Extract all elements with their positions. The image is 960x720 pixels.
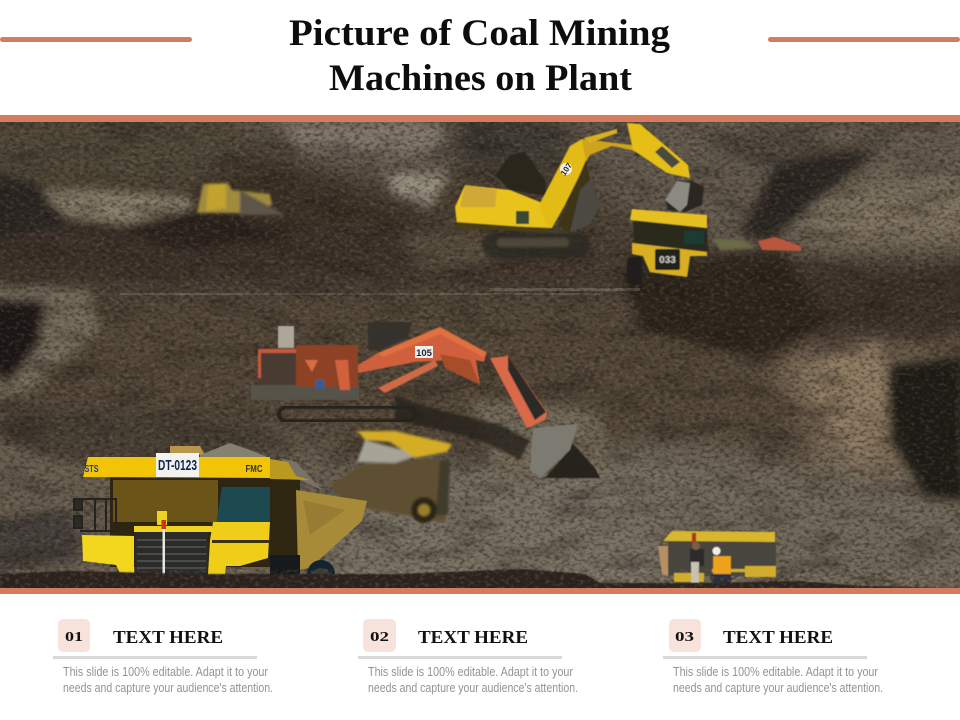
body text 03: needs and capture your audience's attention. xyxy=(673,681,883,695)
photo bottom border band xyxy=(0,588,960,594)
excavator tracks xyxy=(279,407,415,421)
worker with helmet xyxy=(711,547,731,583)
divider 03 xyxy=(663,656,867,659)
small orange machine far right xyxy=(758,237,802,251)
boom and arm xyxy=(358,327,547,428)
excavator tracks xyxy=(482,233,590,258)
number badge 02 xyxy=(363,619,396,652)
yellow dump truck xyxy=(627,209,708,285)
body text 02: needs and capture your audience's attention. xyxy=(368,681,578,695)
divider 02 xyxy=(358,656,562,659)
excavator arm xyxy=(627,123,690,178)
distant dump truck xyxy=(330,431,452,523)
panel: item 03 xyxy=(663,619,883,695)
railings xyxy=(74,499,116,531)
heading 01: TEXT HERE xyxy=(113,627,223,647)
large yellow dump truck: STS xyxy=(84,463,98,475)
yellow excavator xyxy=(455,123,708,285)
large yellow dump truck: DT-0123 xyxy=(158,458,197,474)
small truck with workers xyxy=(658,531,776,583)
radiator grille xyxy=(135,532,208,576)
truck chassis shadow xyxy=(110,477,300,567)
number badge 03: 03 xyxy=(675,630,694,645)
terrain background xyxy=(0,110,960,600)
worker with red cone xyxy=(690,533,704,583)
right title accent line xyxy=(768,37,960,42)
machine house xyxy=(251,322,412,400)
dump body side xyxy=(296,490,367,570)
front right bumper xyxy=(208,522,270,575)
number badge 03 xyxy=(669,619,701,652)
canopy xyxy=(83,457,270,478)
number badge 01 xyxy=(58,619,90,652)
photo top border band xyxy=(0,115,960,122)
heading 03: TEXT HERE xyxy=(723,627,833,647)
body text 01: This slide is 100% editable. Adapt it to your xyxy=(63,665,268,679)
orange excavator: 105 xyxy=(416,348,433,359)
small truck xyxy=(658,531,776,582)
body text 03: This slide is 100% editable. Adapt it to your xyxy=(673,665,878,679)
divider 01 xyxy=(53,656,257,659)
body text 01 xyxy=(63,665,273,695)
foreground rubble xyxy=(0,569,960,590)
distant yellow machine xyxy=(197,183,285,215)
orange excavator xyxy=(251,322,600,478)
title: Machines on Plant xyxy=(329,58,633,99)
photo: coal mining site xyxy=(0,110,960,600)
body text 03 xyxy=(673,665,883,695)
yellow excavator: 107 xyxy=(559,161,574,177)
engine deck xyxy=(134,526,212,532)
excavator boom xyxy=(539,129,640,232)
wheel xyxy=(307,560,335,574)
excavator shadow xyxy=(395,395,530,460)
number badge 02: 02 xyxy=(370,630,389,645)
panel: item 01 xyxy=(53,619,273,695)
terrain texture xyxy=(0,122,960,588)
title xyxy=(289,13,671,99)
body text 01: needs and capture your audience's attention. xyxy=(63,681,273,695)
number badge 01: 01 xyxy=(65,630,83,645)
body text 02: This slide is 100% editable. Adapt it to your xyxy=(368,665,573,679)
panel: item 02 xyxy=(358,619,578,695)
dirt load behind excavator xyxy=(495,152,547,196)
left title accent line xyxy=(0,37,192,42)
front left bumper xyxy=(82,535,134,574)
body text 02 xyxy=(368,665,578,695)
excavator bucket xyxy=(530,424,600,478)
warning pole xyxy=(162,529,165,574)
large yellow dump truck: FMC xyxy=(246,464,262,475)
truck load xyxy=(170,446,205,455)
yellow dump truck: 033 xyxy=(659,255,676,266)
title: Picture of Coal Mining xyxy=(289,13,671,54)
large yellow dump truck xyxy=(74,443,367,588)
green shrub xyxy=(712,238,757,250)
cab window xyxy=(216,487,270,525)
heading 02: TEXT HERE xyxy=(418,627,528,647)
excavator body xyxy=(455,185,552,233)
excavator bucket xyxy=(665,181,704,212)
